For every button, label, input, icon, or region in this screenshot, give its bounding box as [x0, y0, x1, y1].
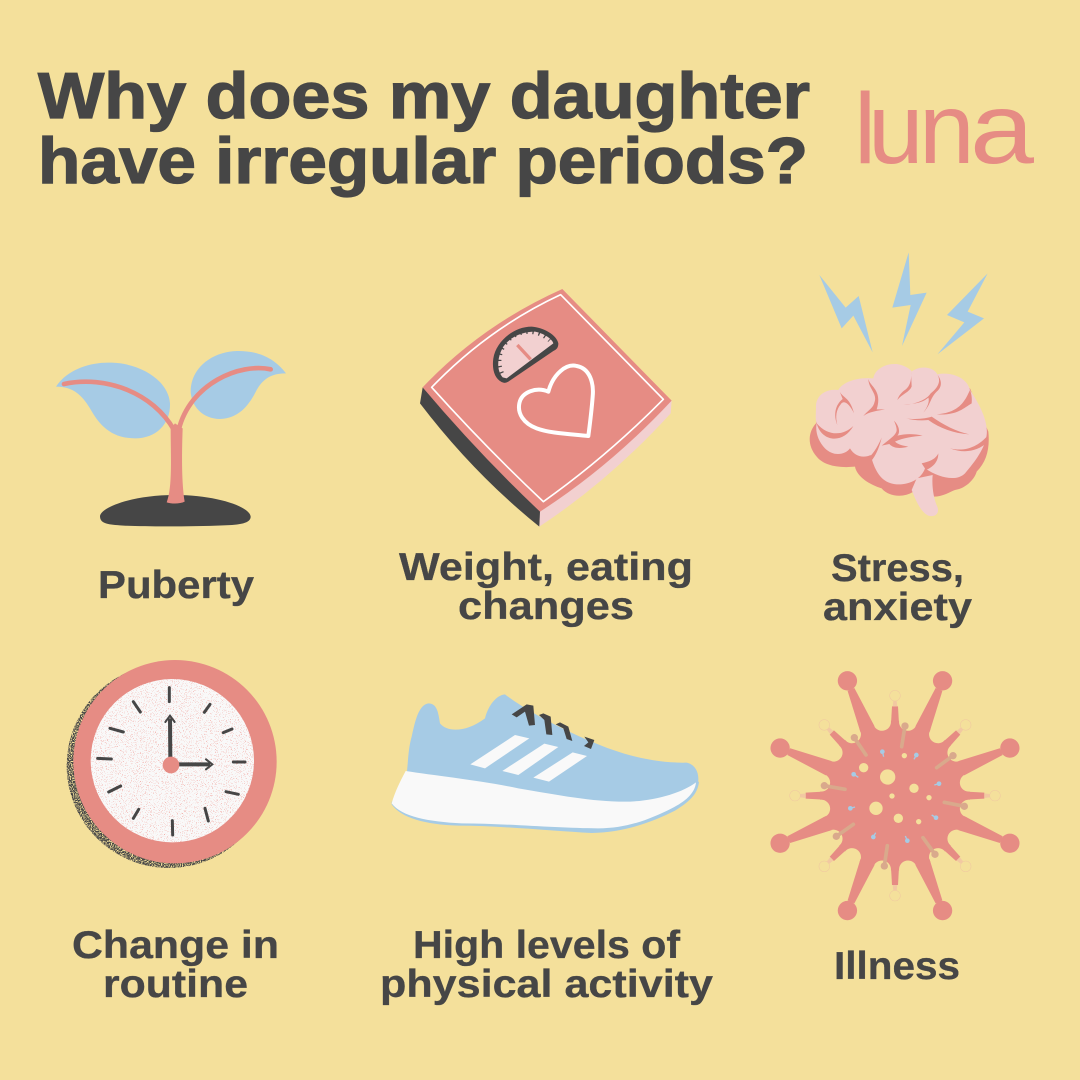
label: Change in routine: Change in	[72, 924, 279, 967]
logo: luna: l	[854, 73, 876, 185]
label: Illness: Illness	[834, 945, 960, 988]
label: Change in routine	[72, 924, 279, 1006]
label: Stress, anxiety	[823, 547, 972, 629]
logo: luna: u	[868, 73, 924, 185]
logo: luna: n	[919, 73, 975, 185]
label: High levels of physical activity: High levels of	[413, 924, 681, 967]
label: Change in routine: routine	[103, 963, 248, 1006]
title	[38, 59, 810, 197]
icon: clock (routine)	[67, 660, 277, 868]
icon: bathroom scale (weight)	[420, 289, 672, 527]
label: High levels of physical activity	[380, 924, 713, 1006]
logo: luna	[854, 73, 1034, 185]
label: Stress, anxiety: Stress,	[831, 547, 964, 590]
label: Weight, eating changes	[399, 546, 693, 628]
label: Weight, eating changes: Weight, eating	[399, 546, 693, 589]
label: High levels of physical activity: physical activity	[380, 963, 713, 1006]
label: Stress, anxiety: anxiety	[823, 586, 972, 629]
title: Why does my daughter	[38, 59, 810, 132]
icon: sprout (puberty)	[56, 351, 286, 526]
label: Weight, eating changes: changes	[458, 585, 634, 628]
title: have irregular periods?	[38, 124, 808, 197]
logo: luna: a	[970, 73, 1034, 185]
label: Puberty: Puberty	[98, 564, 254, 607]
icon: stress bolts and brain	[810, 252, 989, 516]
icon: virus (illness)	[768, 668, 1022, 923]
icon: running shoe (physical activity)	[392, 694, 699, 833]
